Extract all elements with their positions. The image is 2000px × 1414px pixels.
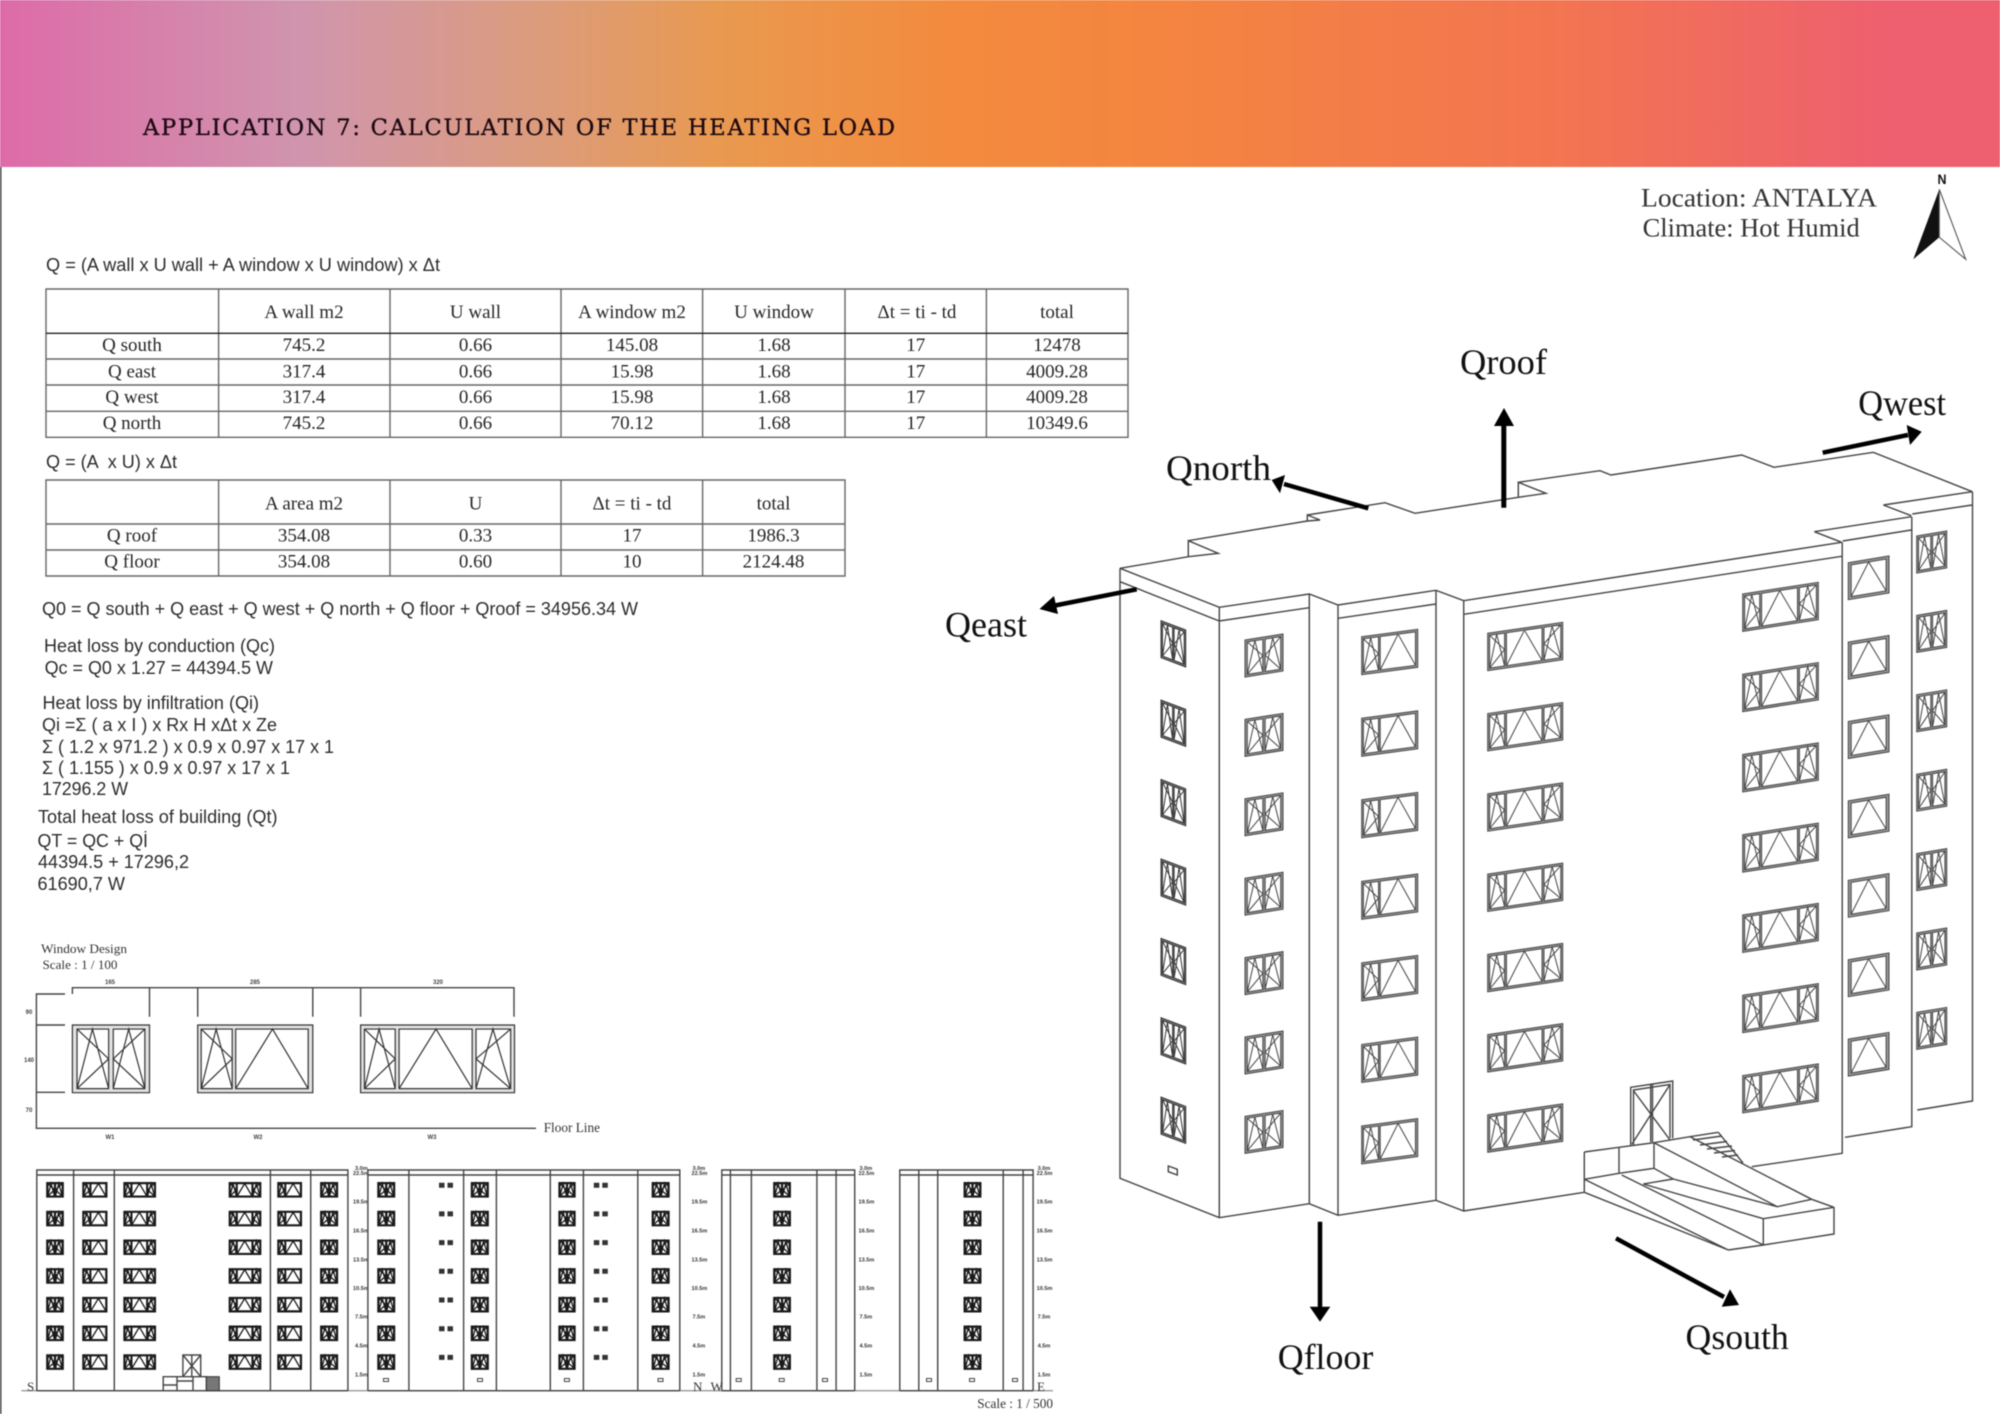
west elevation: [722, 1170, 855, 1391]
level marks east: 13.5m: [1037, 1257, 1052, 1263]
arrow: Qeast: [1040, 589, 1137, 614]
row: Q west: 0.66: [459, 387, 492, 408]
elevation label: E: E: [1037, 1379, 1045, 1394]
dimension lines: W2: [254, 1135, 263, 1141]
windows: south wing column 1: [1245, 634, 1283, 1153]
row: Q east: 1.68: [757, 362, 791, 382]
level marks south: 4.5m: [355, 1344, 368, 1350]
row: Q floor: 0.60: [459, 552, 492, 572]
level marks south: 19.5m: [353, 1200, 369, 1206]
level marks east: 4.5m: [1038, 1344, 1050, 1350]
row: Q north: 745.2: [283, 413, 325, 434]
row: Q floor: 10: [622, 552, 642, 572]
row: Q north: 70.12: [611, 413, 653, 434]
level marks south: 3.0m: [355, 1166, 368, 1172]
elevation labels: N W: [693, 1379, 724, 1394]
dimension lines: 285: [250, 980, 261, 986]
row: Q east: Q east: [108, 362, 157, 382]
level marks west: [858, 1166, 874, 1379]
level marks south: 22.5m: [353, 1171, 369, 1177]
row: Q east: 0.66: [459, 362, 492, 382]
window design caption: Window Design: [41, 941, 127, 956]
table header row: U window: [734, 302, 814, 323]
label: Qfloor: Qfloor: [1278, 1337, 1373, 1377]
dimension lines: W1: [106, 1135, 115, 1141]
level marks north: 7.5m: [692, 1315, 705, 1321]
level marks south: 16.5m: [353, 1229, 369, 1235]
windows: south main column 2: [1743, 582, 1818, 1113]
row: Q west: 15.98: [611, 387, 653, 408]
level marks west: 16.5m: [858, 1229, 874, 1235]
table: roof and floor: [46, 480, 845, 576]
table header row: Δt = ti - td: [593, 494, 672, 514]
row: Q west: 4009.28: [1026, 387, 1088, 408]
level marks north: 16.5m: [692, 1229, 707, 1235]
row: Q west: Q west: [105, 387, 159, 408]
window design caption: Scale : 1 / 100: [42, 957, 118, 972]
level marks south: 13.5m: [353, 1257, 369, 1263]
row: Q floor: 354.08: [278, 552, 330, 572]
level marks north: 19.5m: [692, 1200, 707, 1206]
row: Q west: [105, 387, 1088, 408]
scale label: Scale : 1 / 500: [977, 1396, 1053, 1411]
row: Q south: 0.66: [459, 335, 492, 356]
level marks west: 1.5m: [860, 1373, 872, 1379]
level marks east: 19.5m: [1037, 1200, 1052, 1206]
table header row: [264, 302, 1074, 323]
label: Qwest: Qwest: [1858, 383, 1946, 423]
level marks east: [1037, 1166, 1052, 1379]
level marks east: 7.5m: [1038, 1315, 1050, 1321]
arrow: Qsouth: [1616, 1238, 1739, 1307]
text: heat loss by infiltration: Qi =Σ ( a x I ) x Rx H xΔt x Ze: [42, 715, 277, 735]
level marks east: 22.5m: [1037, 1171, 1052, 1177]
text: total Q0: Q0 = Q south + Q east + Q west + Q north + Q floor + Qroof = 34956.34 W: [42, 599, 638, 619]
building walls: [1120, 492, 1972, 1218]
window design caption: [41, 941, 127, 972]
level marks north: [692, 1166, 707, 1379]
window design drawing: [24, 941, 600, 1141]
windows: east face: [1161, 621, 1186, 1143]
label: Qsouth: Qsouth: [1686, 1317, 1789, 1357]
dimension lines: W3: [428, 1135, 437, 1141]
formula: wall heat loss: Q = (A wall x U wall + A window x U window) x Δt: [46, 255, 440, 275]
entrance door and stairs: [163, 1355, 219, 1391]
text: heat loss by infiltration: Σ ( 1.2 x 971.2 ) x 0.9 x 0.97 x 17 x 1: [42, 737, 334, 757]
arrow: Qfloor: [1310, 1222, 1330, 1322]
table header row: A wall m2: [264, 302, 344, 323]
level marks east: 1.5m: [1038, 1373, 1050, 1379]
row: Q floor: 2124.48: [743, 552, 804, 572]
location and climate text: Location: ANTALYA: [1641, 184, 1877, 213]
row: Q north: 0.66: [459, 413, 492, 434]
row: Q south: Q south: [102, 335, 162, 356]
window type 1: [72, 1025, 150, 1093]
row: Q west: 1.68: [757, 387, 791, 408]
text: total heat loss of building: 44394.5 + 17296,2: [38, 852, 189, 872]
dimension lines: 165: [105, 980, 116, 986]
row: Q east: 17: [906, 362, 925, 382]
level marks north: 22.5m: [692, 1171, 707, 1177]
text: heat loss by infiltration: Heat loss by infiltration (Qi): [42, 693, 259, 713]
windows: wing 3 column: [1917, 531, 1947, 1049]
location and climate text: [1641, 184, 1877, 243]
dimension lines: 90: [26, 1010, 33, 1016]
level marks south: [353, 1166, 369, 1379]
table header row: U wall: [450, 302, 501, 323]
row: Q north: [103, 413, 1088, 434]
table header row: total: [1040, 302, 1074, 323]
text: heat loss by infiltration: 17296.2 W: [42, 779, 128, 799]
dimension lines: [24, 980, 536, 1141]
elevation label: S: S: [27, 1379, 34, 1394]
elevation drawings: [21, 1166, 1053, 1411]
table: walls: [46, 289, 1128, 437]
row: Q roof: 354.08: [278, 526, 330, 547]
windows: south wing column 2: [1362, 629, 1418, 1164]
label: Qroof: Qroof: [1460, 342, 1547, 382]
north elevation: [368, 1170, 680, 1391]
text: heat loss by infiltration: Σ ( 1.155 ) x 0.9 x 0.97 x 17 x 1: [42, 758, 290, 778]
windows: south main column 1: [1488, 622, 1563, 1152]
arrow: Qnorth: [1272, 475, 1368, 508]
table header row: total: [757, 494, 790, 514]
level marks west: 22.5m: [858, 1171, 874, 1177]
arrow: Qroof: [1494, 408, 1514, 508]
level marks east: 10.5m: [1037, 1286, 1052, 1292]
south elevation: [37, 1170, 348, 1391]
title: APPLICATION 7: CALCULATION OF THE HEATING LOAD: [142, 115, 895, 141]
entrance door: [1631, 1081, 1673, 1145]
text: heat loss by conduction: [44, 636, 275, 678]
text: heat loss by conduction: Heat loss by conduction (Qc): [44, 636, 275, 656]
row: Q north: 10349.6: [1026, 413, 1088, 434]
row: Q south: 145.08: [606, 335, 658, 356]
text: total heat loss of building: [38, 807, 278, 894]
row: Q east: [108, 362, 1088, 382]
level marks north: 4.5m: [692, 1344, 705, 1350]
text: heat loss by conduction: Qc = Q0 x 1.27 = 44394.5 W: [45, 658, 273, 678]
formula: roof and floor heat loss: Q = (A x U) x Δt: [46, 452, 177, 472]
level marks south: 1.5m: [355, 1373, 368, 1379]
row: Q roof: 0.33: [459, 526, 492, 547]
row: Q roof: 17: [622, 526, 642, 547]
row: Q south: [102, 335, 1081, 356]
row: Q roof: 1986.3: [747, 526, 800, 547]
row: Q west: 317.4: [283, 387, 326, 408]
icon: north arrow: [1913, 171, 1966, 259]
elevation labels: N W: W: [710, 1379, 724, 1394]
row: Q south: 745.2: [283, 335, 325, 356]
header band: [0, 0, 2000, 167]
table header row: [265, 494, 790, 514]
row: Q south: 17: [906, 335, 925, 356]
row: Q north: 17: [906, 413, 925, 434]
row: Q roof: Q roof: [107, 526, 158, 547]
level marks west: 13.5m: [858, 1257, 874, 1263]
label: Qnorth: Qnorth: [1166, 448, 1271, 488]
table header row: A window m2: [578, 302, 686, 323]
dimension lines: 70: [26, 1108, 33, 1114]
ground line: [21, 1390, 1053, 1392]
table header row: Δt = ti - td: [878, 302, 957, 323]
window type 3: [361, 1025, 514, 1093]
row: Q east: 4009.28: [1026, 362, 1088, 382]
level marks west: 3.0m: [860, 1166, 872, 1172]
row: Q south: 1.68: [757, 335, 791, 356]
level marks north: 10.5m: [692, 1286, 707, 1292]
east elevation: [900, 1170, 1033, 1391]
floor line label: Floor Line: [544, 1121, 600, 1136]
row: Q north: Q north: [103, 413, 162, 434]
dimension lines: 320: [433, 980, 444, 986]
row: Q floor: [104, 552, 804, 572]
level marks south: 10.5m: [353, 1286, 369, 1292]
text: total heat loss of building: Total heat loss of building (Qt): [38, 807, 278, 827]
level marks west: 19.5m: [858, 1200, 874, 1206]
dimension lines: 140: [24, 1058, 35, 1064]
table header row: U: [469, 494, 483, 514]
text: heat loss by infiltration: [42, 693, 334, 799]
text: total heat loss of building: QT = QC + Qİ: [38, 831, 148, 851]
level marks east: 16.5m: [1037, 1229, 1052, 1235]
building roof outline: [1120, 452, 1972, 568]
level marks west: 4.5m: [860, 1344, 872, 1350]
level marks north: 13.5m: [692, 1257, 707, 1263]
text: total heat loss of building: 61690,7 W: [38, 874, 125, 894]
row: Q east: 15.98: [611, 362, 653, 382]
icon: north arrow: N: [1938, 171, 1946, 187]
entrance ramp and stairs: [1584, 1132, 1834, 1250]
table header row: A area m2: [265, 494, 343, 514]
level marks west: 10.5m: [858, 1286, 874, 1292]
isometric building drawing: [1120, 452, 1972, 1250]
row: Q roof: [107, 526, 800, 547]
label: Qeast: Qeast: [945, 604, 1027, 644]
level marks north: 3.0m: [692, 1166, 705, 1172]
level marks south: 7.5m: [355, 1315, 368, 1321]
row: Q north: 1.68: [757, 413, 791, 434]
location and climate text: Climate: Hot Humid: [1643, 214, 1860, 243]
window type 2: [198, 1025, 313, 1093]
row: Q west: 17: [906, 387, 925, 408]
elevation labels: N W: N: [693, 1379, 703, 1394]
row: Q floor: Q floor: [104, 552, 160, 572]
row: Q east: 317.4: [283, 362, 326, 382]
windows: wing 2 column: [1848, 556, 1889, 1076]
row: Q south: 12478: [1033, 335, 1081, 356]
level marks east: 3.0m: [1038, 1166, 1050, 1172]
level marks west: 7.5m: [860, 1315, 872, 1321]
level marks north: 1.5m: [692, 1373, 705, 1379]
arrow: Qwest: [1823, 425, 1922, 453]
